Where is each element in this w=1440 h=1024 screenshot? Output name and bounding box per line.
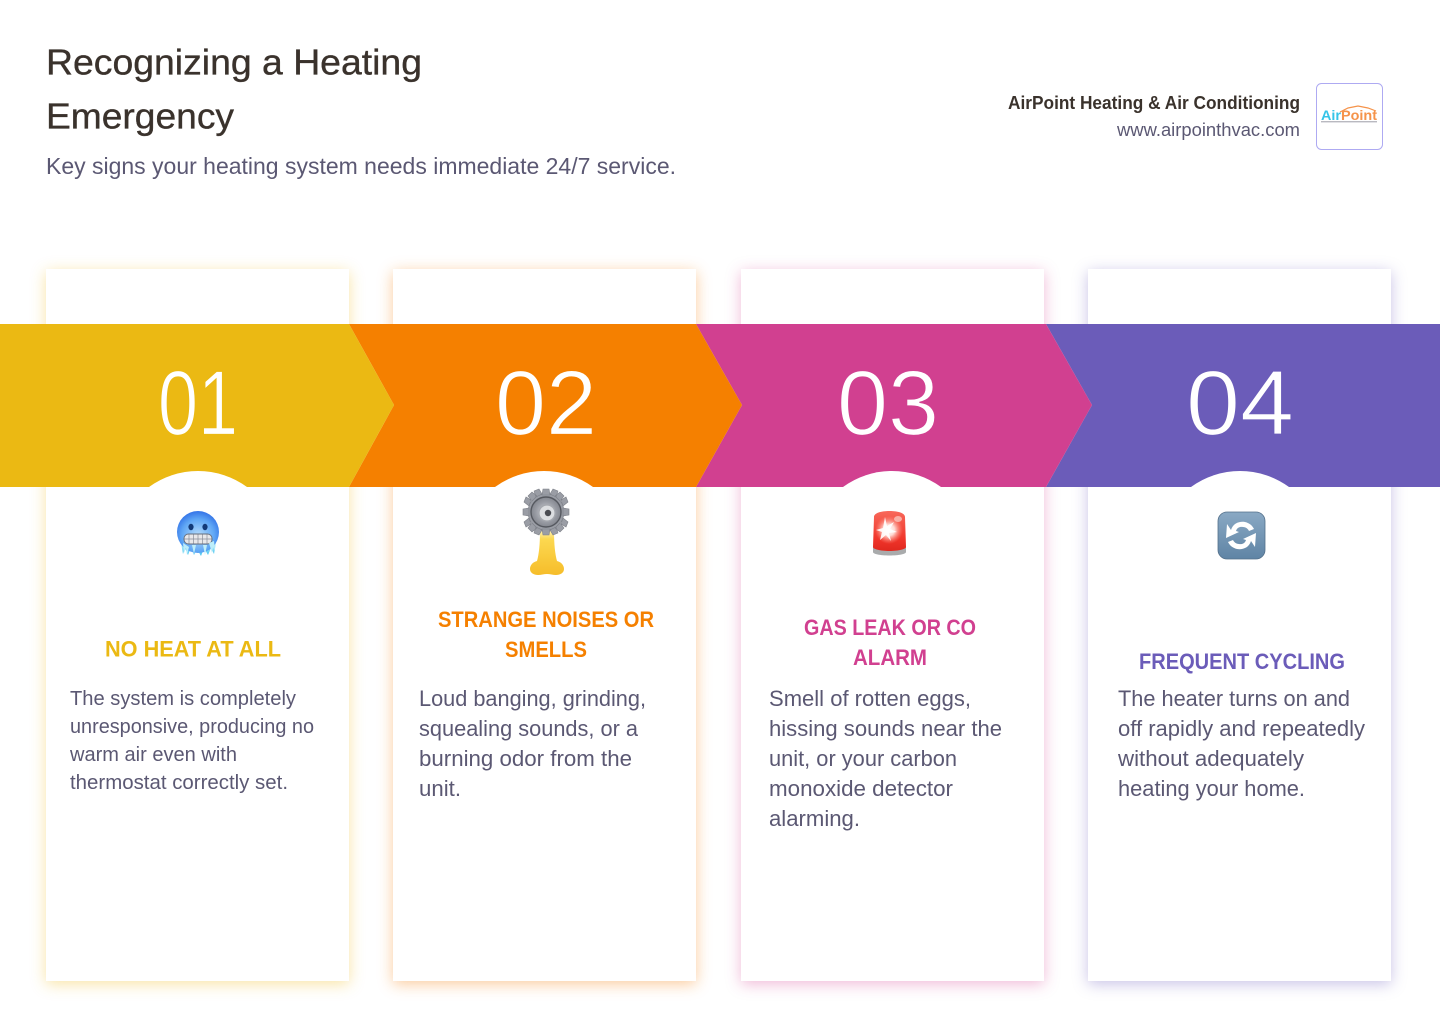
body text: unit. [419,776,461,801]
panel: card 3 background [741,269,1044,981]
panel: card 2 background [393,269,696,981]
body text: without adequately [1117,746,1304,771]
panel: strange noises or smells [419,607,654,801]
arrow band: step 2 [349,324,742,487]
body text: off rapidly and repeatedly [1118,716,1365,741]
subtitle: Key signs your heating system needs immediate 24/7 service. [46,153,676,179]
number 02: 02 [495,352,597,454]
number 03: 03 [837,352,939,454]
title [46,42,422,136]
body text [1117,686,1365,801]
logo: Point [1341,107,1377,123]
logo [1316,84,1382,150]
body text [769,686,1002,831]
panel: no heat at all [69,636,314,794]
title: Recognizing a Heating [46,42,422,82]
icon: refresh arrows [1218,512,1265,559]
company name and website [1008,93,1300,140]
icon notch: step 2 [495,471,593,487]
title: Emergency [46,96,234,136]
body text [69,688,314,794]
company name and website: www.airpointhvac.com [1116,120,1300,140]
company name and website: AirPoint Heating & Air Conditioning [1008,93,1300,113]
panel: card 1 background [46,269,349,981]
body text: Loud banging, grinding, [419,686,646,711]
body text: unit, or your carbon [769,746,957,771]
heading: GAS LEAK OR CO [804,615,976,640]
heading: FREQUENT CYCLING [1139,649,1345,674]
body text: thermostat correctly set. [70,772,288,794]
panel: gas leak or co alarm [769,615,1002,831]
body text: unresponsive, producing no [70,716,314,738]
body text: monoxide detector [769,776,953,801]
body text: The system is completely [70,688,296,710]
heading [438,607,654,662]
arrow band: step 3 [696,324,1092,487]
heading: SMELLS [505,637,587,662]
body text: hissing sounds near the [769,716,1002,741]
icon: gear and nose [523,489,569,575]
heading: STRANGE NOISES OR [438,607,654,632]
panel: frequent cycling [1117,649,1365,801]
logo: Air [1321,107,1342,123]
heading: ALARM [853,645,927,670]
arrow band: step 1 [0,324,394,487]
body text: alarming. [769,806,860,831]
body text: heating your home. [1118,776,1305,801]
number 01: 01 [158,352,238,454]
body text [419,686,646,801]
body text: squealing sounds, or a [419,716,639,741]
body text: warm air even with [69,744,237,766]
icon: police light [873,511,906,556]
icon notch: step 4 [1191,471,1289,487]
panel: card 4 background [1088,269,1391,981]
icon: cold face [177,511,219,556]
icon notch: step 1 [149,471,247,487]
arrow band: step 4 [1046,324,1440,487]
body text: The heater turns on and [1118,686,1350,711]
body text: burning odor from the [419,746,632,771]
icon notch: step 3 [843,471,941,487]
heading: NO HEAT AT ALL [105,636,281,662]
body text: Smell of rotten eggs, [769,686,971,711]
heading [804,615,976,670]
number 04: 04 [1186,352,1294,454]
